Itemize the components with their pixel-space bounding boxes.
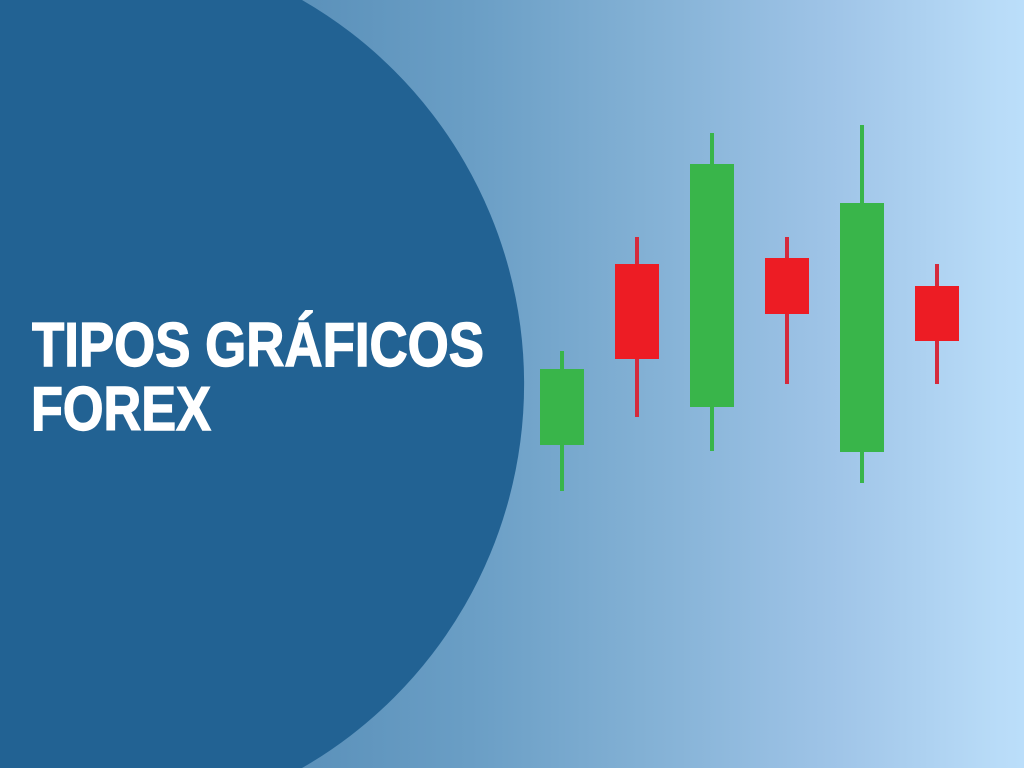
candle 5 green (840, 125, 884, 483)
candlestick chart (540, 125, 959, 491)
title: FOREX (31, 375, 211, 444)
panel: dark blue circle (0, 0, 524, 768)
candle 6 red (915, 264, 959, 384)
candle 1 green (540, 351, 584, 491)
title: TIPOS GRÁFICOS (32, 311, 484, 380)
candle 3 green (690, 133, 734, 451)
candle 4 red (765, 237, 809, 384)
title (31, 311, 484, 444)
candle 2 red (615, 237, 659, 417)
